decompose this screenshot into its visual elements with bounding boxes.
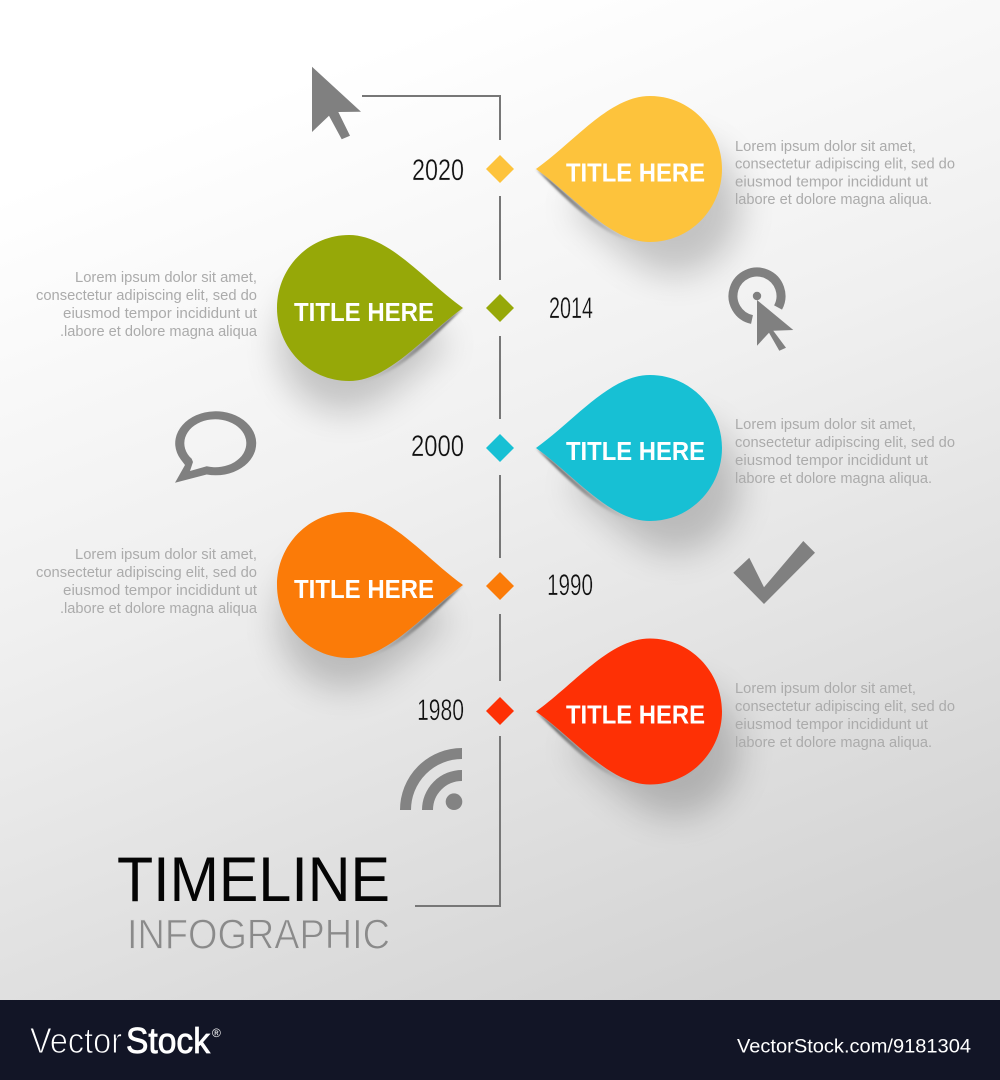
- icon: click cursor: [733, 272, 793, 351]
- teardrop: [536, 638, 722, 784]
- year: 2000: [411, 430, 464, 463]
- diamond: [486, 434, 514, 462]
- description: eiusmod tempor incididunt ut: [735, 717, 928, 733]
- panel: 2020: [412, 96, 955, 274]
- footer bar: [0, 1000, 1000, 1080]
- title: [117, 845, 390, 958]
- icon: speech bubble: [175, 411, 256, 483]
- teardrop: [536, 375, 722, 521]
- drop shadow: [536, 140, 740, 274]
- icon: arrow cursor: [312, 67, 361, 139]
- drop shadow: [279, 554, 463, 688]
- footer logo: Stock: [126, 1020, 211, 1061]
- title: TITLE HERE: [566, 438, 705, 466]
- teardrop: [277, 512, 463, 658]
- panel: 2000: [411, 375, 955, 553]
- description: [735, 417, 955, 487]
- footer logo: ®: [212, 1026, 221, 1040]
- description: [735, 139, 955, 208]
- icon: wifi signal: [406, 754, 462, 810]
- year: 2020: [412, 154, 464, 187]
- title: TITLE HERE: [294, 576, 434, 604]
- drop shadow: [536, 682, 740, 817]
- description: labore et dolore magna aliqua.: [735, 192, 932, 208]
- diamond: [486, 294, 514, 322]
- description: consectetur adipiscing elit, sed do: [36, 565, 257, 581]
- description: labore et dolore magna aliqua.: [735, 471, 932, 487]
- description: consectetur adipiscing elit, sed do: [735, 699, 955, 715]
- teardrop: [277, 235, 463, 381]
- description: consectetur adipiscing elit, sed do: [735, 157, 955, 173]
- panel: 1980: [417, 638, 955, 817]
- icon: check mark: [733, 541, 815, 604]
- description: Lorem ipsum dolor sit amet,: [75, 547, 257, 563]
- description: eiusmod tempor incididunt ut: [63, 583, 257, 599]
- description: eiusmod tempor incididunt ut: [63, 306, 257, 322]
- diamond: [486, 697, 514, 725]
- title: TITLE HERE: [294, 299, 434, 327]
- description: .labore et dolore magna aliqua: [60, 324, 258, 340]
- title: TIMELINE: [117, 845, 390, 915]
- panel: 2014: [36, 235, 593, 411]
- description: [36, 547, 258, 617]
- title: TITLE HERE: [566, 702, 705, 730]
- description: [735, 681, 955, 751]
- teardrop: [536, 96, 722, 242]
- description: Lorem ipsum dolor sit amet,: [735, 417, 916, 433]
- year: 1980: [417, 694, 464, 727]
- footer logo: [30, 1020, 221, 1061]
- year: 2014: [549, 292, 593, 325]
- footer logo: Vector: [30, 1020, 122, 1061]
- description: Lorem ipsum dolor sit amet,: [75, 270, 257, 286]
- description: [36, 270, 258, 340]
- diamond: [486, 572, 514, 600]
- description: Lorem ipsum dolor sit amet,: [735, 681, 916, 697]
- timeline line: [362, 96, 500, 906]
- description: eiusmod tempor incididunt ut: [735, 174, 928, 190]
- description: labore et dolore magna aliqua.: [735, 735, 932, 751]
- description: eiusmod tempor incididunt ut: [735, 453, 928, 469]
- drop shadow: [536, 419, 740, 553]
- description: consectetur adipiscing elit, sed do: [735, 435, 955, 451]
- description: Lorem ipsum dolor sit amet,: [735, 139, 916, 155]
- footer id: VectorStock.com/9181304: [737, 1036, 971, 1058]
- panel: 1990: [36, 512, 593, 688]
- description: .labore et dolore magna aliqua: [60, 601, 258, 617]
- drop shadow: [279, 277, 463, 411]
- description: consectetur adipiscing elit, sed do: [36, 288, 257, 304]
- title: TITLE HERE: [566, 160, 705, 188]
- subtitle: INFOGRAPHIC: [127, 910, 390, 958]
- diamond: [486, 155, 514, 183]
- year: 1990: [547, 569, 593, 602]
